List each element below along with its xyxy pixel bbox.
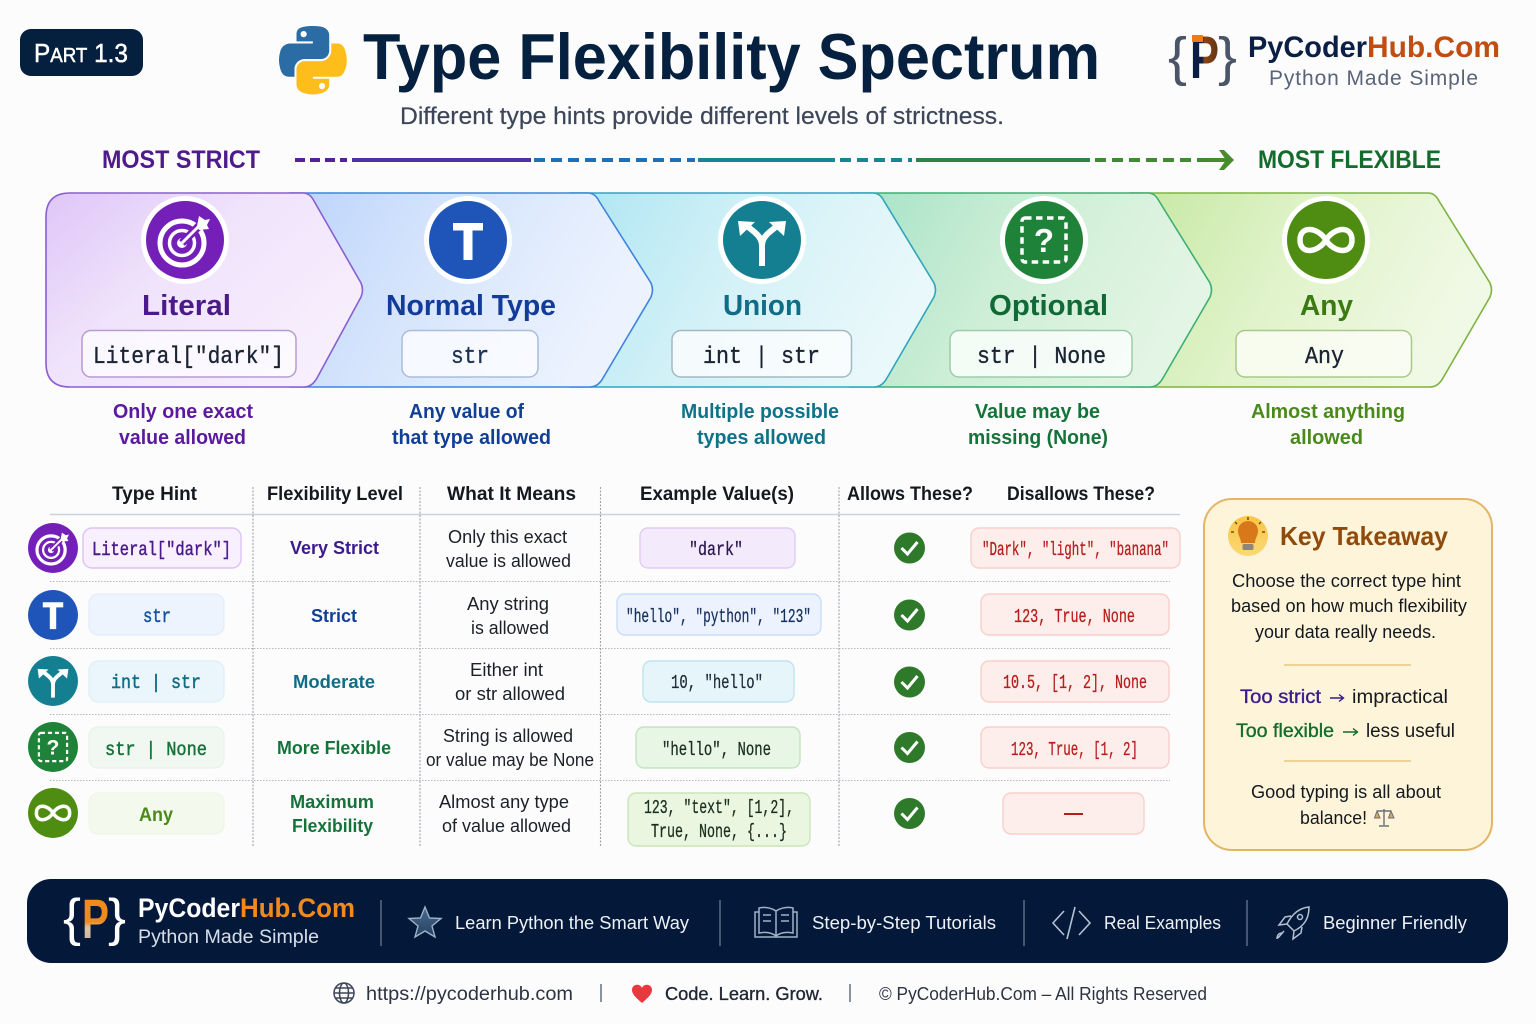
icon: dashed question — [1000, 196, 1088, 284]
logo: PyCoderHub.Com header: } — [1218, 27, 1237, 87]
type hint chip: str | None — [105, 739, 207, 761]
example chip: True, None, {...} — [651, 821, 787, 843]
disallowed chip — [981, 661, 1169, 702]
arrow: strictness spectrum — [295, 150, 1234, 170]
table: type hint comparison — [28, 484, 1180, 846]
label: most flexible: MOST FLEXIBLE — [1258, 146, 1441, 174]
text: Any description — [1251, 401, 1405, 449]
icon: target — [141, 196, 229, 284]
label: Literal: Literal — [142, 290, 231, 322]
type hint chip — [83, 528, 241, 568]
meaning: Only this exact — [448, 526, 567, 547]
check — [894, 798, 925, 829]
code box: int | str — [672, 330, 852, 377]
disallowed chip — [1003, 793, 1144, 834]
type hint chip: Literal["dark"] — [92, 539, 231, 561]
table header — [112, 484, 1155, 505]
text: Optional description: missing (None) — [968, 427, 1108, 449]
icon: infinity small — [28, 788, 78, 838]
text: Optional description — [968, 401, 1108, 449]
text: Literal description — [113, 401, 253, 449]
icon: globe — [334, 983, 354, 1003]
icon: question small: ? — [47, 737, 59, 760]
text: Any description: allowed — [1290, 427, 1363, 449]
text: Union description — [681, 401, 839, 449]
example chip: "hello", None — [662, 739, 771, 761]
icon: star — [409, 907, 441, 937]
text: balance: balance! — [1300, 808, 1367, 828]
icon: fork arrows — [718, 196, 806, 284]
logo: PyCoderHub.Com footer: Python Made Simple — [138, 927, 319, 948]
text: Normal Type description: Any value of — [409, 401, 524, 423]
icon: book — [755, 907, 797, 937]
icon: dashed question: ? — [1034, 222, 1054, 259]
item: real examples — [1053, 907, 1221, 939]
check — [894, 732, 925, 763]
icon: code brackets — [1053, 907, 1090, 939]
icon: rocket — [1277, 907, 1309, 939]
type hint chip: int | str — [111, 672, 201, 694]
flexibility level: Maximum — [290, 791, 374, 812]
panel: Any chevron — [1130, 193, 1492, 387]
label: Normal Type: Normal Type — [386, 290, 556, 322]
row: Any — [28, 788, 1144, 846]
icon: question small — [28, 722, 78, 772]
example chip: "dark" — [689, 539, 743, 561]
item: tutorials — [755, 907, 996, 937]
disallowed chip — [971, 528, 1180, 568]
example chip — [636, 727, 800, 768]
row: str — [28, 590, 1169, 640]
icon: T small — [28, 590, 78, 640]
meaning — [426, 725, 594, 770]
meaning — [446, 526, 571, 571]
logo: PyCoderHub.Com header: PyCoder — [1248, 31, 1367, 64]
meaning: Almost any type — [439, 791, 569, 812]
logo: PyCoderHub.Com footer: { — [63, 889, 81, 947]
flexibility level: Very Strict — [290, 537, 379, 558]
text: too strict: impractical — [1352, 687, 1448, 708]
table header: Allows These? — [847, 484, 973, 505]
text: website: https://pycoderhub.com — [366, 984, 573, 1005]
code box: str | None — [950, 330, 1132, 377]
icon: target small — [28, 523, 78, 573]
text: balance — [1251, 782, 1441, 828]
heading: key takeaway: Key Takeaway — [1280, 521, 1449, 551]
icon: fork small — [28, 656, 78, 706]
icon: letter T — [424, 196, 512, 284]
badge: Part 1.3 — [20, 29, 143, 76]
type hint chip: str — [143, 606, 171, 628]
table header: Disallows These? — [1007, 484, 1155, 505]
panel: Optional chevron — [850, 193, 1212, 387]
code box: Literal["dark"] — [82, 330, 296, 377]
text: too strict — [1240, 687, 1448, 708]
panel: key takeaway — [1204, 499, 1492, 850]
item: learn python: Learn Python the Smart Way — [455, 912, 690, 933]
code box: int | str: int | str — [703, 344, 820, 371]
panel: Union chevron — [570, 193, 936, 387]
flexibility level — [290, 791, 374, 836]
table header: Example Value(s) — [640, 484, 794, 505]
logo: PyCoderHub.Com header: { — [1168, 27, 1187, 87]
icon: Python logo — [279, 26, 347, 95]
type hint chip — [89, 727, 224, 768]
item: beginner friendly — [1277, 907, 1468, 939]
logo: PyCoderHub.Com footer: P — [82, 887, 109, 950]
item: beginner friendly: Beginner Friendly — [1323, 912, 1468, 933]
text: Normal Type description: that type allowed — [392, 427, 551, 449]
meaning: of value allowed — [442, 815, 571, 836]
text: Literal description: value allowed — [119, 427, 246, 449]
check — [894, 600, 925, 630]
meaning: or str allowed — [455, 683, 565, 704]
icon: light bulb — [1228, 516, 1268, 556]
text: motto: Code. Learn. Grow. — [665, 983, 823, 1004]
icon: infinity — [1282, 196, 1370, 284]
text: Union description: Multiple possible — [681, 401, 839, 423]
text: too flexible: Too flexible — [1236, 721, 1334, 742]
logo: PyCoderHub.Com footer: Hub.Com — [240, 893, 355, 923]
disallowed chip: 123, True, [1, 2] — [1011, 739, 1138, 761]
meaning — [455, 659, 565, 704]
example chip — [643, 661, 794, 702]
item: learn python — [409, 907, 690, 937]
type hint chip — [89, 661, 224, 702]
code box: str — [402, 330, 538, 377]
flexibility level: Flexibility — [292, 815, 374, 836]
meaning — [467, 593, 549, 638]
example chip: "hello", "python", "123" — [626, 606, 811, 628]
type hint chip — [89, 594, 224, 635]
label: Optional: Optional — [989, 290, 1108, 322]
text: advice: your data really needs. — [1255, 622, 1436, 642]
item: real examples: Real Examples — [1104, 912, 1221, 933]
disallowed chip: "Dark", "light", "banana" — [982, 539, 1169, 561]
meaning: is allowed — [471, 617, 549, 638]
text: too flexible — [1236, 721, 1455, 742]
flexibility level: Moderate — [293, 671, 375, 692]
example chip: 123, "text", [1,2], — [644, 797, 794, 819]
text: Optional description: Value may be — [975, 401, 1100, 423]
code box: Any: Any — [1305, 344, 1344, 371]
label: Any: Any — [1300, 290, 1353, 322]
label: most strict: MOST STRICT — [102, 146, 260, 174]
label: Union: Union — [723, 290, 802, 322]
code box: Any — [1236, 330, 1412, 377]
text: balance: Good typing is all about — [1251, 782, 1441, 802]
example chip: 10, "hello" — [671, 672, 763, 694]
logo: PyCoderHub.Com header: Hub.Com — [1367, 31, 1500, 64]
text: advice: based on how much flexibility — [1231, 596, 1467, 616]
text: advice — [1231, 571, 1467, 642]
example chip — [617, 594, 821, 635]
row: int | str — [28, 656, 1169, 706]
disallowed chip: 10.5, [1, 2], None — [1003, 672, 1147, 694]
text: too flexible: less useful — [1366, 721, 1455, 742]
type hint chip — [89, 793, 224, 834]
logo: PyCoderHub.Com header: Python Made Simple — [1269, 67, 1478, 90]
text: Literal description: Only one exact — [113, 401, 253, 423]
badge: Part 1.3: PART 1.3 — [34, 38, 128, 68]
logo: PyCoderHub.Com footer: PyCoder — [138, 893, 240, 923]
meaning: Any string — [467, 593, 549, 614]
type hint chip: Any — [139, 805, 173, 826]
logo: PyCoderHub.Com footer — [63, 887, 355, 950]
panel: Literal chevron — [46, 193, 362, 387]
disallowed chip — [981, 594, 1169, 635]
logo: PyCoderHub.Com header — [1168, 24, 1500, 91]
table header: What It Means — [447, 484, 576, 505]
icon: heart — [632, 985, 652, 1003]
meaning: value is allowed — [446, 550, 571, 571]
row: Literal — [28, 523, 1180, 573]
meaning: or value may be None — [426, 749, 594, 770]
flexibility level: Strict — [311, 605, 357, 626]
title: Type Flexibility Spectrum — [363, 20, 1100, 93]
table header: Type Hint — [112, 484, 198, 505]
text: too strict: Too strict — [1240, 687, 1322, 708]
meaning: Either int — [470, 659, 543, 680]
text: Normal Type description — [392, 401, 551, 449]
example chip — [628, 793, 810, 846]
meaning: String is allowed — [443, 725, 573, 746]
code box: str | None: str | None — [977, 344, 1106, 371]
icon: scales — [1374, 809, 1394, 826]
disallowed chip — [981, 727, 1169, 768]
check — [894, 666, 925, 698]
text: Union description: types allowed — [697, 427, 826, 449]
text: Any description: Almost anything — [1251, 401, 1405, 423]
item: tutorials: Step-by-Step Tutorials — [812, 912, 996, 933]
code box: Literal["dark"]: Literal["dark"] — [93, 344, 284, 371]
check — [894, 532, 925, 564]
subtitle: Different type hints provide different levels of strictness. — [400, 103, 1004, 130]
bottom credits — [334, 983, 1207, 1005]
text: advice: Choose the correct type hint — [1232, 571, 1461, 591]
panel: Normal Type chevron — [290, 193, 652, 387]
disallowed chip: 123, True, None — [1014, 606, 1135, 628]
example chip — [640, 528, 795, 568]
row: str | None — [28, 722, 1169, 772]
logo: PyCoderHub.Com header: P — [1190, 24, 1219, 91]
code box: str: str — [451, 344, 489, 371]
table header: Flexibility Level — [267, 484, 403, 505]
footer banner — [27, 879, 1508, 963]
flexibility level: More Flexible — [277, 737, 391, 758]
text: copyright: © PyCoderHub.Com – All Rights Reserved — [879, 984, 1207, 1004]
logo: PyCoderHub.Com footer: } — [108, 889, 126, 947]
meaning — [439, 791, 571, 836]
